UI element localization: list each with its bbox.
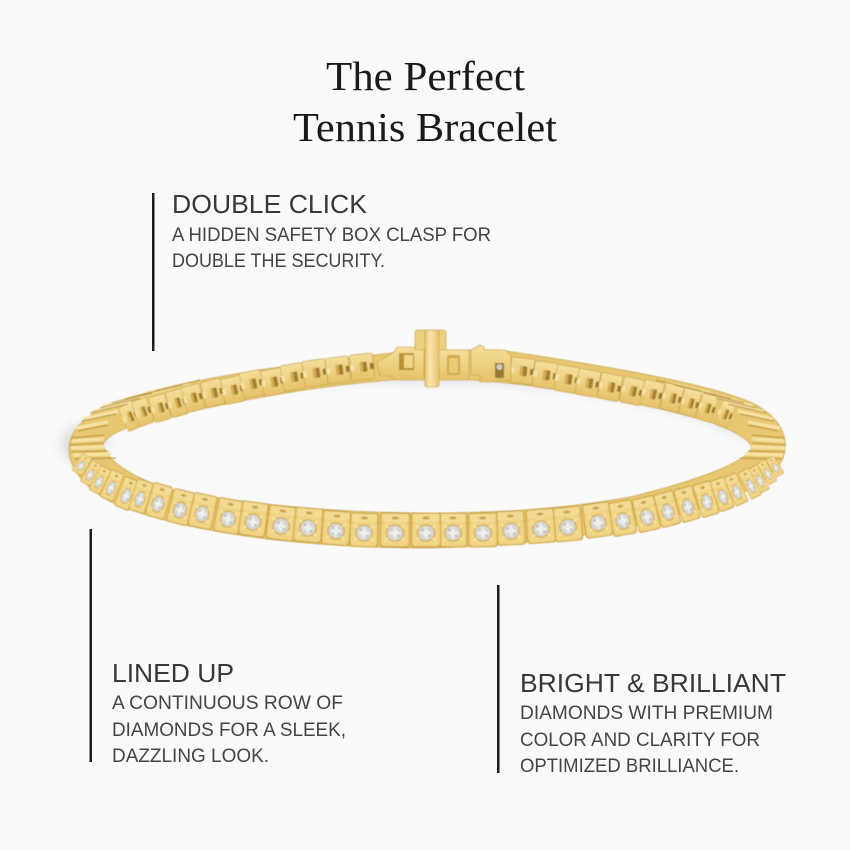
title: Tennis Bracelet: [293, 104, 558, 150]
back links right: [509, 357, 737, 429]
bracelet: [60, 330, 786, 548]
clasp: [377, 330, 511, 387]
front diamond links right: [411, 455, 784, 547]
heading: bright and brilliant: BRIGHT & BRILLIANT: [520, 668, 786, 698]
text: bright and brilliant description: DIAMONDS WITH PREMIUM: [520, 703, 773, 724]
callout: double click: [152, 189, 491, 351]
bracelet shadow: [60, 365, 755, 475]
text: bright and brilliant description: OPTIMIZED BRILLIANCE.: [520, 756, 739, 777]
text: bright and brilliant description: [520, 703, 773, 777]
text: lined up description: A CONTINUOUS ROW OF: [112, 693, 343, 714]
heading: double click: DOUBLE CLICK: [172, 189, 368, 219]
title: [293, 53, 558, 150]
text: double click description: [172, 225, 491, 272]
side ribs light: [71, 383, 785, 455]
text: bright and brilliant description: COLOR AND CLARITY FOR: [520, 730, 760, 751]
text: double click description: A HIDDEN SAFETY BOX CLASP FOR: [172, 225, 491, 246]
back links left: [118, 353, 375, 432]
text: lined up description: [112, 693, 346, 767]
heading: lined up: LINED UP: [112, 658, 234, 688]
title: The Perfect: [326, 53, 526, 99]
callout: bright and brilliant: [497, 585, 786, 777]
band: [69, 350, 785, 548]
text: lined up description: DAZZLING LOOK.: [112, 746, 269, 767]
side ribs dark: [70, 380, 786, 459]
bracelet metal: [69, 330, 786, 548]
text: lined up description: DIAMONDS FOR A SLEEK,: [112, 720, 346, 741]
front diamond links left: [72, 453, 410, 547]
callout: lined up: [90, 529, 346, 767]
text: double click description: DOUBLE THE SECURITY.: [172, 251, 385, 272]
